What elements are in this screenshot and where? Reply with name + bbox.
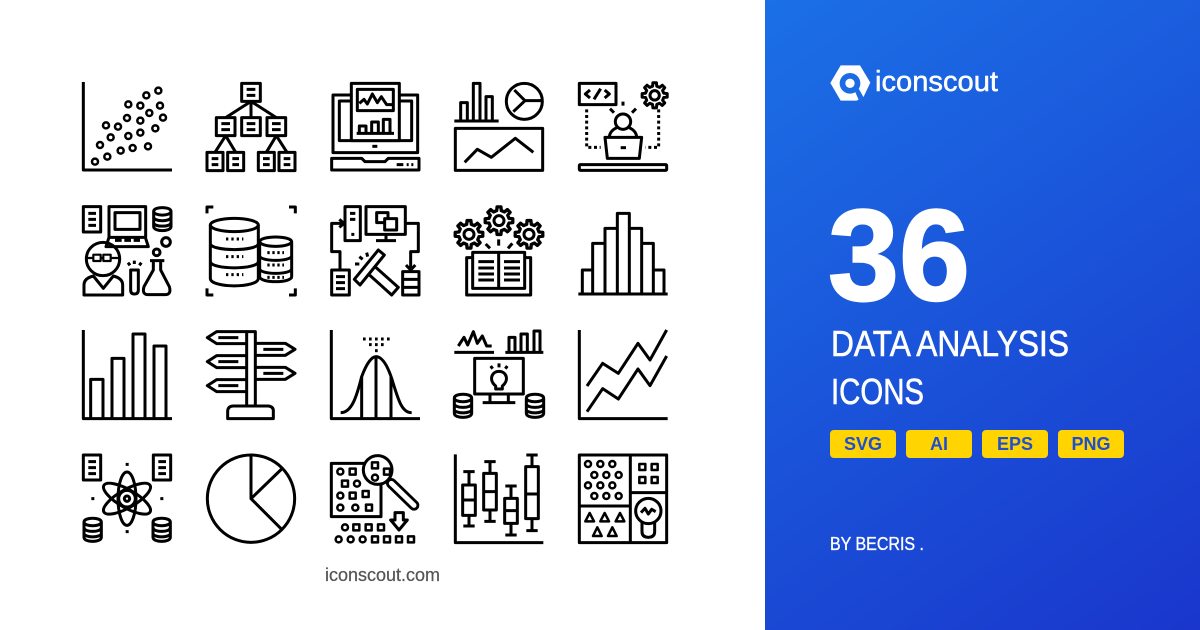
icon: data scientist: [83, 207, 171, 295]
badge: EPS: [982, 430, 1048, 458]
panel: blue title panel: [765, 0, 1200, 630]
icon: magnifier over data points: [331, 456, 414, 542]
icon: hierarchy tree: [207, 83, 295, 171]
badge: SVG: [830, 430, 896, 458]
badge: AI: AI: [930, 434, 948, 454]
badge: PNG: PNG: [1071, 434, 1111, 454]
icon: bar chart: [83, 330, 172, 419]
icon: data mining tools: [332, 207, 419, 295]
icon: pie chart: [207, 455, 295, 542]
badge: AI: [906, 430, 972, 458]
icon: monitor with idea and charts: [454, 331, 544, 417]
icon: book with gears: [455, 207, 543, 295]
icon: charts board: [454, 83, 543, 170]
badge: EPS: EPS: [997, 434, 1033, 454]
page background: [0, 0, 765, 630]
author: BY BECRIS .: [830, 534, 924, 554]
title line 2: ICONS: [831, 371, 924, 412]
icon: histogram: [578, 213, 668, 294]
icon: line chart: [579, 330, 668, 419]
logo wordmark: iconscout: [875, 66, 998, 98]
logo: iconscout mark: [830, 65, 870, 101]
big number: 36: [828, 182, 970, 328]
title line 1: DATA ANALYSIS: [831, 323, 1069, 364]
icon: database stack: [207, 207, 295, 295]
icon: box plot: [455, 454, 543, 543]
badge: SVG: SVG: [844, 434, 882, 454]
icon: signpost: [207, 332, 295, 419]
icon: scatter plot: [83, 82, 172, 170]
badge: PNG: [1058, 430, 1124, 458]
icon: developer with code and gear: [579, 83, 667, 170]
icon: atom with data: [83, 455, 171, 541]
icon: laptop dashboard: [332, 83, 419, 170]
icon: bell curve: [331, 330, 420, 419]
icon: treemap: [579, 455, 667, 543]
footer site name: iconscout.com: [325, 565, 440, 585]
